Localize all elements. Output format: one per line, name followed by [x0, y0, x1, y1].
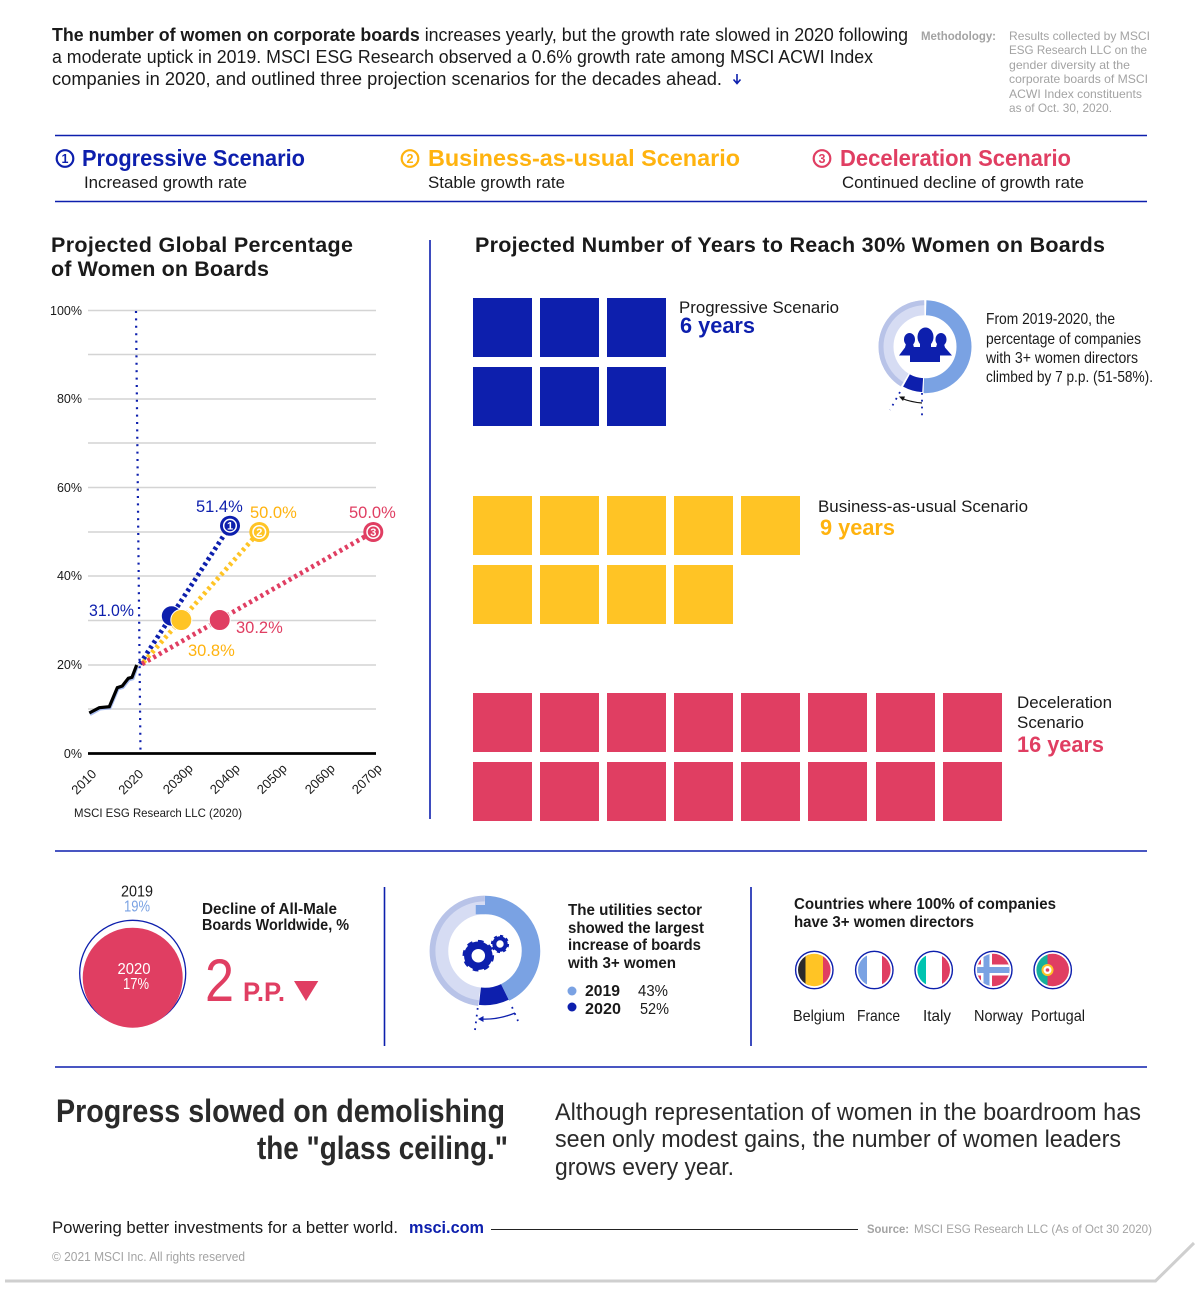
end marker 1: [220, 516, 240, 536]
scenario 2 heading: 2: [407, 152, 414, 166]
end marker 2: [249, 522, 269, 542]
flags: Norway: [974, 1008, 1023, 1025]
callout: 7 p.p. climb: climbed by 7 p.p. (51-58%).: [986, 369, 1153, 386]
scenario 3 heading: [814, 145, 1084, 192]
flags: Italy: [923, 1008, 951, 1025]
methodology note: ACWI Index constituents: [1009, 87, 1142, 101]
bubble: all-male boards: [80, 884, 186, 1028]
scenario 2 heading: Business-as-usual Scenario: [428, 145, 740, 171]
line chart: 40%: [57, 569, 82, 583]
line chart: 51.4%: [196, 498, 243, 516]
closing text: [555, 1099, 1141, 1181]
flag: France: [856, 951, 893, 989]
footer: msci.com: [409, 1219, 484, 1237]
heading: projected global percentage: Projected Global Percentage: [51, 233, 353, 257]
donut: companies with 3+ women directors: [881, 303, 969, 418]
stat: decline of all-male boards: Decline of All-Male: [202, 901, 337, 918]
heading: countries: Countries where 100% of companies: [794, 896, 1056, 913]
closing text: grows every year.: [555, 1154, 734, 1181]
line chart: 2050p: [254, 761, 290, 797]
callout: 7 p.p. climb: with 3+ women directors: [985, 350, 1138, 367]
icon: gears: [464, 936, 508, 970]
stat: decline of all-male boards: [202, 901, 349, 1014]
text: utilities sector: showed the largest: [568, 920, 705, 937]
chart source: MSCI ESG Research LLC (2020): [74, 806, 242, 820]
flag: Belgium: [796, 951, 833, 989]
legend: utilities 2019 vs 2020: 2020: [585, 1001, 621, 1018]
line chart: 20%: [57, 658, 82, 672]
flags: Portugal: [1031, 1008, 1085, 1025]
scenario 3 heading: Continued decline of growth rate: [842, 174, 1084, 192]
methodology note: Methodology:: [921, 29, 996, 43]
text: utilities sector: increase of boards: [568, 937, 701, 954]
flags: [793, 951, 1085, 1025]
label: business as usual: Business-as-usual Scenario: [818, 497, 1028, 516]
stat: decline of all-male boards: 2: [205, 947, 234, 1014]
bubble: all-male boards: 17%: [123, 976, 149, 993]
heading: projected global percentage: of Women on Boards: [51, 257, 269, 281]
callout: 7 p.p. climb: percentage of companies: [986, 331, 1141, 348]
intro text: a moderate uptick in 2019. MSCI ESG Research observed a 0.6% growth rate among MSCI ACWI Index: [52, 47, 873, 67]
methodology note: ESG Research LLC on the: [1009, 43, 1147, 57]
line chart: 2070p: [349, 761, 385, 797]
flag: Norway: [975, 951, 1012, 989]
end marker 3: [363, 522, 383, 542]
label: deceleration: Scenario: [1017, 713, 1084, 732]
scenario 2 heading: Stable growth rate: [428, 174, 565, 192]
flags: France: [857, 1008, 900, 1025]
line chart: 2020: [115, 766, 146, 797]
flags: Belgium: [793, 1008, 845, 1025]
closing headline: [56, 1093, 508, 1166]
text: utilities sector: with 3+ women: [567, 955, 676, 972]
text: utilities sector: [567, 902, 705, 972]
methodology note: Results collected by MSCI: [1009, 29, 1150, 43]
icon: people: [899, 328, 952, 362]
footer: Powering better investments for a better world.: [52, 1219, 398, 1237]
line chart: [50, 304, 396, 797]
projection: deceleration: [142, 532, 373, 664]
heading: countries: have 3+ women directors: [794, 914, 974, 931]
heading: countries: [794, 896, 1056, 931]
methodology note: gender diversity at the: [1009, 58, 1130, 72]
line chart: 100%: [50, 304, 82, 318]
flag: Italy: [915, 951, 952, 989]
scenario 1 heading: Increased growth rate: [84, 174, 247, 192]
footer: Source:: [867, 1222, 909, 1236]
scenario 3 heading: 3: [819, 152, 826, 166]
methodology note: [921, 29, 1150, 115]
intro text: The number of women on corporate boards increases yearly, but the growth rate slowed in 2020 following: [52, 25, 908, 45]
callout: 7 p.p. climb: From 2019-2020, the: [986, 311, 1115, 328]
stat: decline of all-male boards: Boards Worldwide, %: [202, 917, 349, 934]
label: business as usual: 9 years: [820, 515, 895, 540]
intro text: [52, 25, 908, 89]
methodology note: as of Oct. 30, 2020.: [1009, 101, 1112, 115]
donut: utilities sector: [432, 898, 538, 1030]
scenario 2 heading: [402, 145, 740, 192]
text: utilities sector: The utilities sector: [568, 902, 702, 919]
line chart: 2040p: [207, 761, 243, 797]
bubble: all-male boards: 19%: [124, 898, 150, 916]
callout: 7 p.p. climb: [985, 311, 1153, 386]
label: deceleration: 16 years: [1017, 732, 1104, 757]
projection: progressive: [140, 526, 230, 664]
legend: utilities 2019 vs 2020: 43%: [638, 983, 668, 1000]
footer: MSCI ESG Research LLC (As of Oct 30 2020): [914, 1222, 1152, 1236]
label: progressive scenario: [679, 298, 839, 338]
footer: [52, 1219, 1152, 1264]
flag: Portugal: [1034, 951, 1072, 989]
heading: years to reach 30%: Projected Number of Years to Reach 30% Women on Boards: [475, 233, 1105, 257]
end marker 3: 3: [370, 527, 376, 539]
line chart: 50.0%: [250, 504, 297, 522]
line chart: 0%: [64, 747, 82, 761]
line chart: 2030p: [160, 761, 196, 797]
label: progressive scenario: 6 years: [680, 313, 755, 338]
scenario 1 heading: Progressive Scenario: [82, 145, 305, 171]
intro text: companies in 2020, and outlined three projection scenarios for the decades ahead.: [52, 69, 722, 89]
waffle: progressive 6 years: [473, 298, 666, 426]
line chart: 2060p: [302, 761, 338, 797]
line chart: 30.2%: [236, 619, 283, 637]
heading: projected global percentage: [51, 233, 353, 281]
end marker 1: 1: [227, 521, 233, 533]
scenario 1 heading: [57, 145, 305, 192]
label: progressive scenario: Progressive Scenario: [679, 298, 839, 317]
line chart: 80%: [57, 392, 82, 406]
bubble: all-male boards: 2020: [118, 961, 151, 978]
bubble: all-male boards: 2019: [121, 884, 153, 900]
waffle: business as usual 9 years: [473, 496, 800, 624]
line chart: 2010: [68, 766, 99, 797]
legend: utilities 2019 vs 2020: 52%: [640, 1001, 669, 1018]
methodology note: corporate boards of MSCI: [1009, 72, 1148, 86]
legend: utilities 2019 vs 2020: [568, 983, 669, 1018]
scenario 3 heading: Deceleration Scenario: [840, 145, 1071, 171]
stat: decline of all-male boards: P.P.: [243, 977, 285, 1007]
label: business as usual: [818, 497, 1028, 540]
legend: utilities 2019 vs 2020: 2019: [585, 983, 620, 1000]
label: deceleration: Deceleration: [1017, 693, 1112, 712]
scenario 1 heading: 1: [62, 152, 69, 166]
end marker 2: 2: [256, 527, 262, 539]
closing text: seen only modest gains, the number of women leaders: [555, 1126, 1121, 1153]
line chart: 31.0%: [89, 602, 134, 620]
closing headline: Progress slowed on demolishing: [56, 1093, 505, 1129]
closing text: Although representation of women in the boardroom has: [555, 1099, 1141, 1126]
waffle: deceleration 16 years: [473, 693, 1002, 821]
label: deceleration: [1017, 693, 1112, 757]
line chart: 30.8%: [188, 642, 235, 660]
line chart: 50.0%: [349, 504, 396, 522]
scenario legend: [57, 145, 1084, 192]
closing headline: the "glass ceiling.": [257, 1130, 508, 1166]
projection: business as usual: [141, 532, 259, 665]
footer: © 2021 MSCI Inc. All rights reserved: [52, 1250, 245, 1264]
line chart: 60%: [57, 481, 82, 495]
